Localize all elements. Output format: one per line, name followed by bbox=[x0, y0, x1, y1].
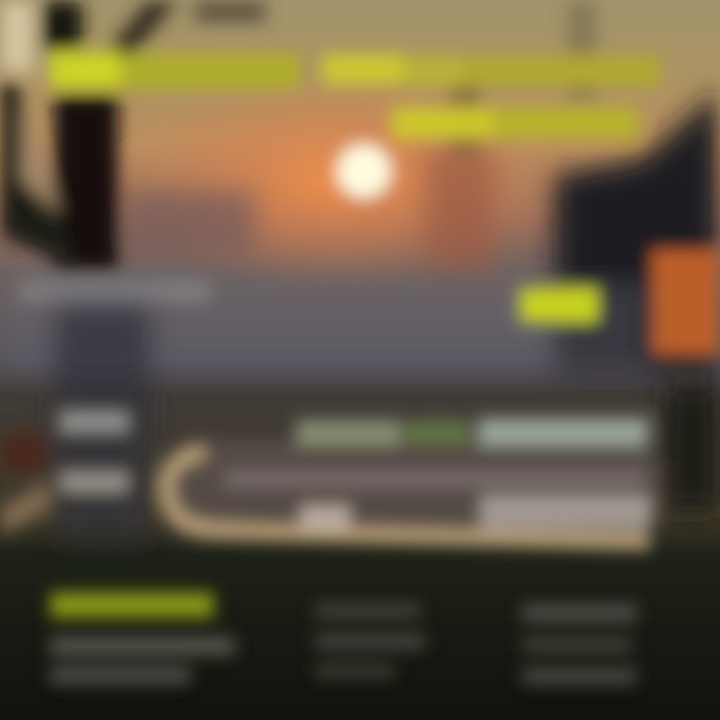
distant hills bbox=[125, 150, 495, 270]
panel text row bbox=[225, 472, 650, 529]
title line one: yellow highlighted heading bbox=[50, 52, 660, 88]
panel heading row bbox=[296, 418, 648, 446]
yellow badge bbox=[520, 288, 598, 322]
footer column two: body text bbox=[315, 603, 425, 678]
mid band: translucent panel bbox=[0, 280, 650, 372]
left edge: reddish accent bbox=[0, 435, 50, 535]
footer column one: body text bbox=[50, 637, 235, 684]
footer column three: body text bbox=[522, 604, 637, 684]
right edge: dark foliage bbox=[665, 385, 720, 510]
title line two: yellow highlighted heading bbox=[392, 108, 638, 138]
left column: vertical panel bbox=[55, 305, 150, 540]
house silhouette right bbox=[555, 90, 720, 370]
sun glow bbox=[115, 70, 565, 290]
footer column one: yellow heading bbox=[50, 592, 214, 618]
tree silhouette left bbox=[0, 0, 265, 270]
house window: orange light bbox=[652, 250, 720, 354]
pole silhouette bbox=[450, 0, 596, 153]
left heading text block bbox=[20, 280, 210, 302]
central panel: rounded cream outline bbox=[165, 418, 660, 542]
sun disc bbox=[337, 144, 391, 198]
left column text rows bbox=[60, 412, 128, 492]
